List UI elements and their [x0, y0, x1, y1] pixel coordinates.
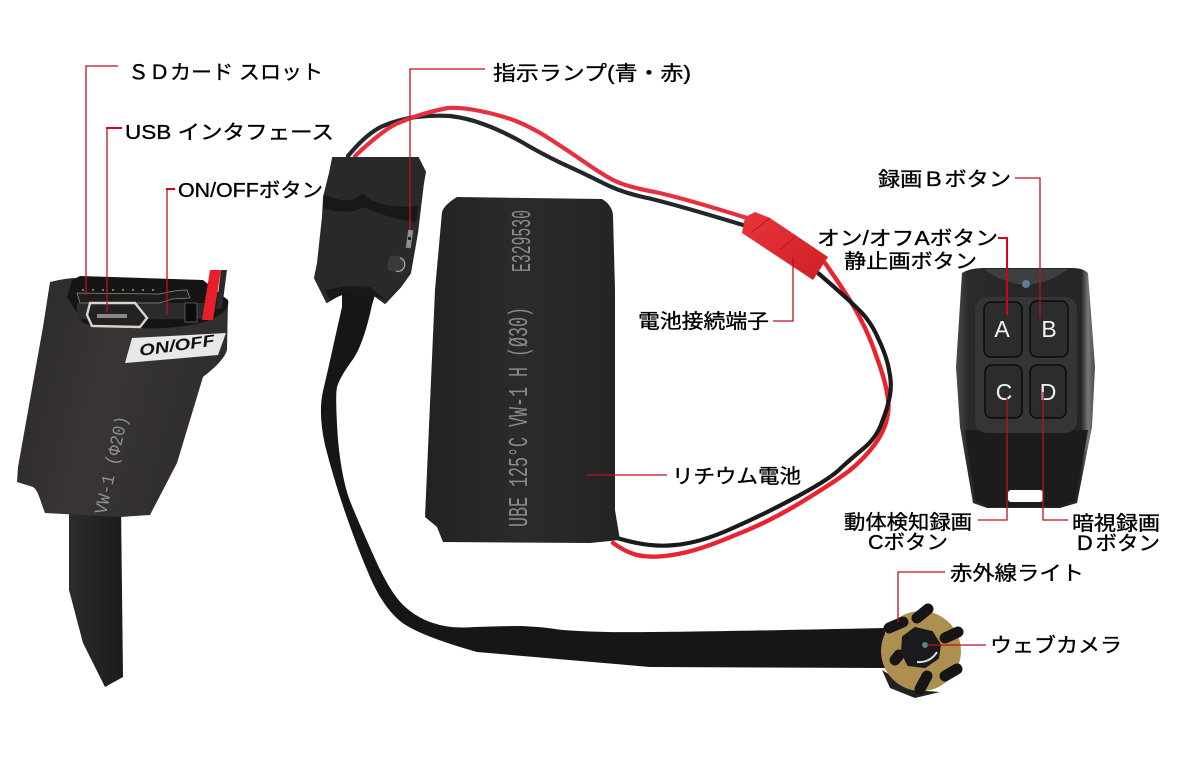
- status led: [1022, 280, 1030, 288]
- infrared receiver: [387, 255, 406, 273]
- circuit board band: [77, 303, 205, 319]
- label: night vision D button: 暗視録画: [1072, 512, 1160, 535]
- label: record B button: 録画Ｂボタン: [878, 168, 1011, 191]
- key ring hole: [1008, 490, 1043, 502]
- board underside: [882, 670, 940, 698]
- wires between connector and battery: [613, 263, 891, 557]
- label: SD card slot: ＳＤカード スロット: [128, 62, 323, 84]
- control module: [315, 158, 425, 303]
- module printing: VW-1 (Φ20): [92, 414, 134, 516]
- label: indicator lamp: 指示ランプ(青・赤): [493, 62, 691, 85]
- battery printing top: E329530: [509, 210, 539, 272]
- label: on off A button: [817, 227, 1007, 315]
- label: on off A button: 静止画ボタン: [844, 250, 977, 273]
- button D: D: [1040, 379, 1056, 405]
- button A: [984, 302, 1022, 357]
- remote control: [956, 268, 1095, 508]
- button B: [1030, 301, 1068, 357]
- red battery connector: [742, 212, 828, 280]
- label: infrared light: 赤外線ライト: [950, 562, 1084, 585]
- infrared leds: [889, 609, 958, 689]
- module body: [17, 278, 228, 517]
- wires between module and connector: [348, 108, 747, 225]
- indicator lamp: [406, 230, 413, 248]
- on off sticker: [125, 332, 226, 363]
- top dome: [984, 269, 1068, 284]
- button D: [1030, 365, 1066, 418]
- label: night vision D button: [1043, 392, 1160, 555]
- button C: [985, 365, 1022, 418]
- panel: close-up of main module: [17, 270, 228, 687]
- button A: A: [994, 316, 1010, 342]
- on off switch: [185, 303, 197, 322]
- label: lithium battery: リチウム電池: [672, 465, 801, 488]
- connector opening: [67, 276, 228, 328]
- mini USB port: [87, 303, 147, 327]
- flat ribbon stub: [69, 505, 123, 687]
- circuit board: [881, 611, 961, 691]
- label: motion detection C button: [844, 398, 1007, 554]
- label: on off button: ON/OFFボタン: [178, 179, 323, 202]
- label: night vision D button: Ｄボタン: [1074, 532, 1160, 555]
- camera board: [881, 609, 961, 698]
- button C: C: [996, 379, 1012, 405]
- label: motion detection C button: Cボタン: [868, 531, 948, 554]
- SD card slot: [77, 290, 190, 303]
- remote lower body: [965, 430, 1088, 507]
- on off sticker: ON/OFF: [138, 332, 217, 360]
- label: on off A button: オン/オフAボタン: [817, 227, 998, 250]
- flat cable from module to camera: [321, 285, 885, 668]
- power wires: [202, 270, 227, 320]
- label: SD card slot: [86, 62, 323, 295]
- battery printing bottom: UBE 125°C VW-1 H (Ø30): [506, 307, 536, 527]
- label: battery connector: 電池接続端子: [638, 310, 769, 333]
- label: infrared light: [898, 562, 1084, 622]
- button B: B: [1041, 316, 1057, 342]
- lithium battery: [425, 197, 620, 543]
- label: web camera: ウェブカメラ: [990, 633, 1122, 657]
- label: record B button: [878, 168, 1040, 318]
- shrink wrap creases: [323, 193, 418, 300]
- label: USB interface: USB インタフェース: [125, 121, 334, 144]
- label: motion detection C button: 動体検知録画: [844, 511, 972, 534]
- label: battery connector: [638, 257, 793, 333]
- button panel: [975, 297, 1077, 433]
- lens: [902, 628, 940, 667]
- label: indicator lamp: [410, 62, 691, 230]
